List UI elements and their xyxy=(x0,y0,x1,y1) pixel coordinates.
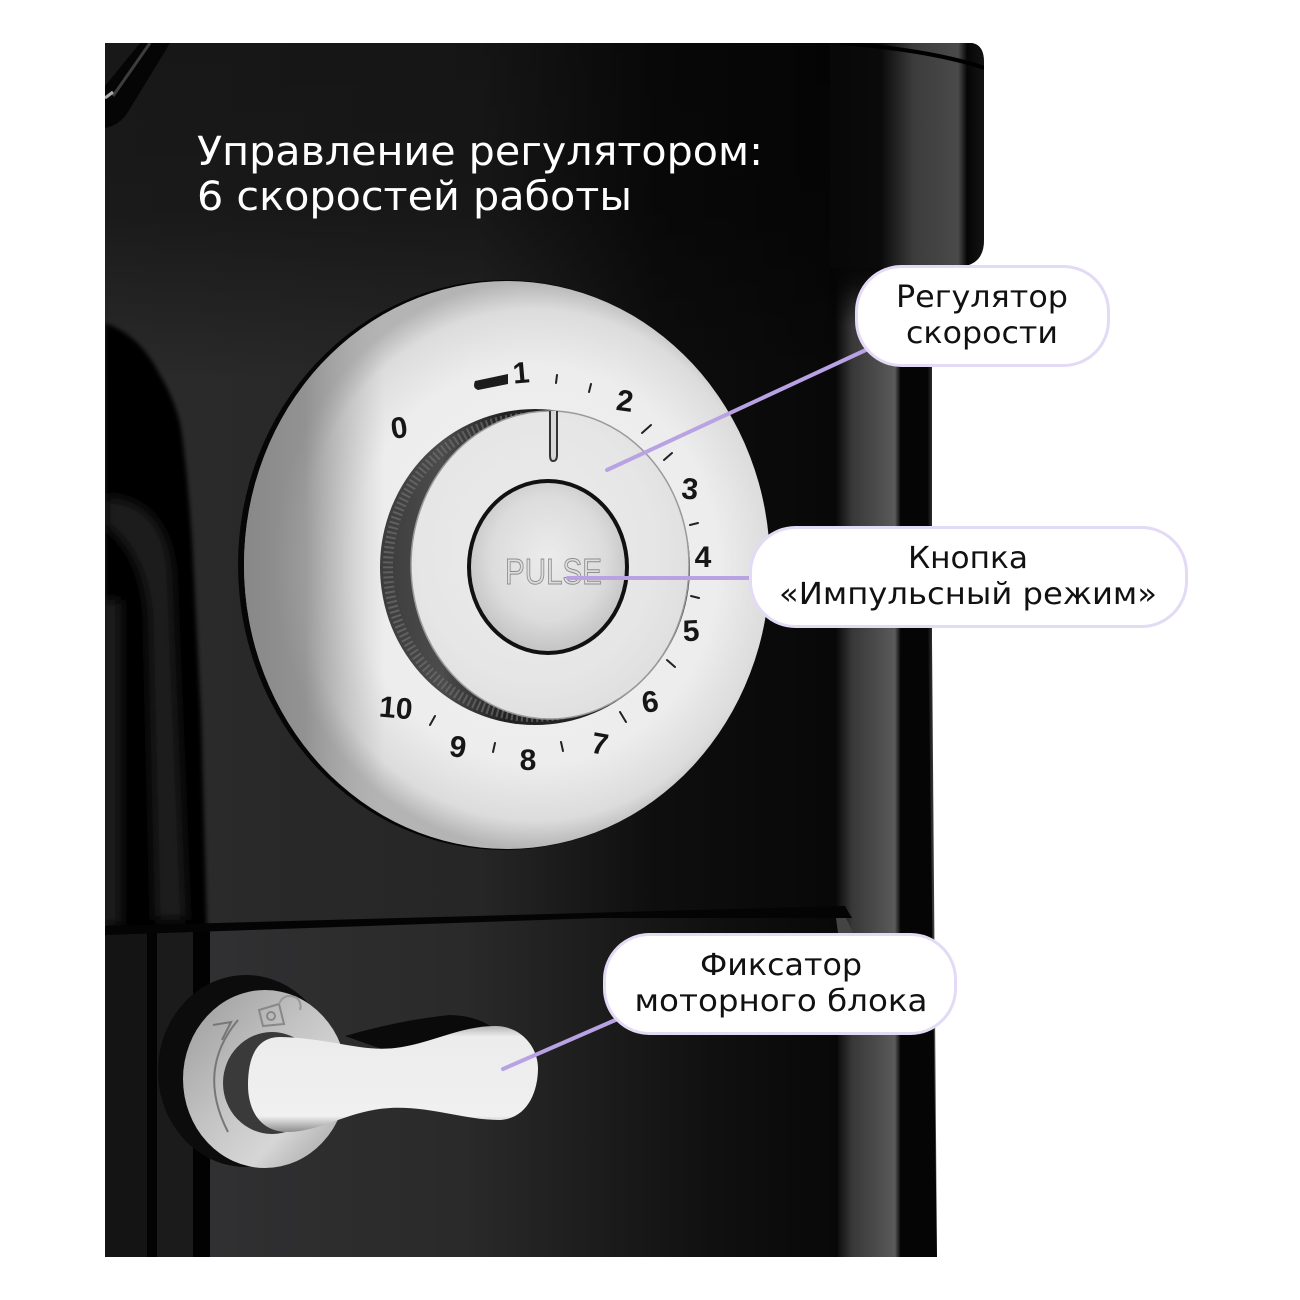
mixer body xyxy=(100,43,985,1257)
scale numbers: 8 xyxy=(520,744,536,777)
scale numbers: 7 xyxy=(589,727,611,762)
knurled ring xyxy=(380,409,690,725)
callout: speed regulator: скорости xyxy=(906,316,1058,351)
callout: pulse button xyxy=(750,528,1186,626)
callout: pulse button: Кнопка xyxy=(908,541,1028,576)
callout: lock xyxy=(604,934,956,1034)
outer silver disc xyxy=(238,280,770,850)
knob face xyxy=(411,411,689,719)
dark arch on left side xyxy=(100,323,207,930)
locking lever xyxy=(158,975,538,1168)
scale ticks and bar xyxy=(430,374,699,752)
upper housing xyxy=(830,43,985,268)
speed dial xyxy=(238,280,770,850)
callout: speed regulator: Регулятор xyxy=(896,280,1068,315)
lever handle xyxy=(248,1026,538,1132)
scale numbers xyxy=(378,356,712,777)
scale numbers: 9 xyxy=(447,730,468,765)
leader line: lock xyxy=(503,1018,620,1069)
callout: lock: моторного блока xyxy=(634,984,928,1019)
scale numbers: 10 xyxy=(378,691,414,726)
scale numbers: 6 xyxy=(640,685,661,720)
lower door panel xyxy=(105,630,937,1257)
title xyxy=(197,129,763,220)
callout: lock: Фиксатор xyxy=(700,948,862,983)
lever base xyxy=(158,975,347,1168)
scale numbers: 0 xyxy=(389,411,410,446)
scale numbers: 4 xyxy=(695,541,712,574)
title: Управление регулятором: xyxy=(197,129,763,175)
title: 6 скоростей работы xyxy=(197,174,632,220)
callout: speed regulator xyxy=(856,266,1108,366)
scale numbers: 1 xyxy=(511,356,531,391)
top-left glossy corner xyxy=(105,43,170,128)
scale numbers: 2 xyxy=(614,384,635,419)
leader line: pulse button xyxy=(568,576,752,580)
lever shadow xyxy=(345,1015,495,1052)
pulse button xyxy=(469,481,627,653)
callout: pulse button: «Импульсный режим» xyxy=(779,577,1157,612)
scale numbers: 3 xyxy=(680,472,700,507)
pulse button: PULSE xyxy=(505,551,602,592)
scale numbers: 5 xyxy=(682,615,700,648)
knob indicator notch xyxy=(550,411,557,461)
leader line: speed regulator xyxy=(607,349,868,470)
